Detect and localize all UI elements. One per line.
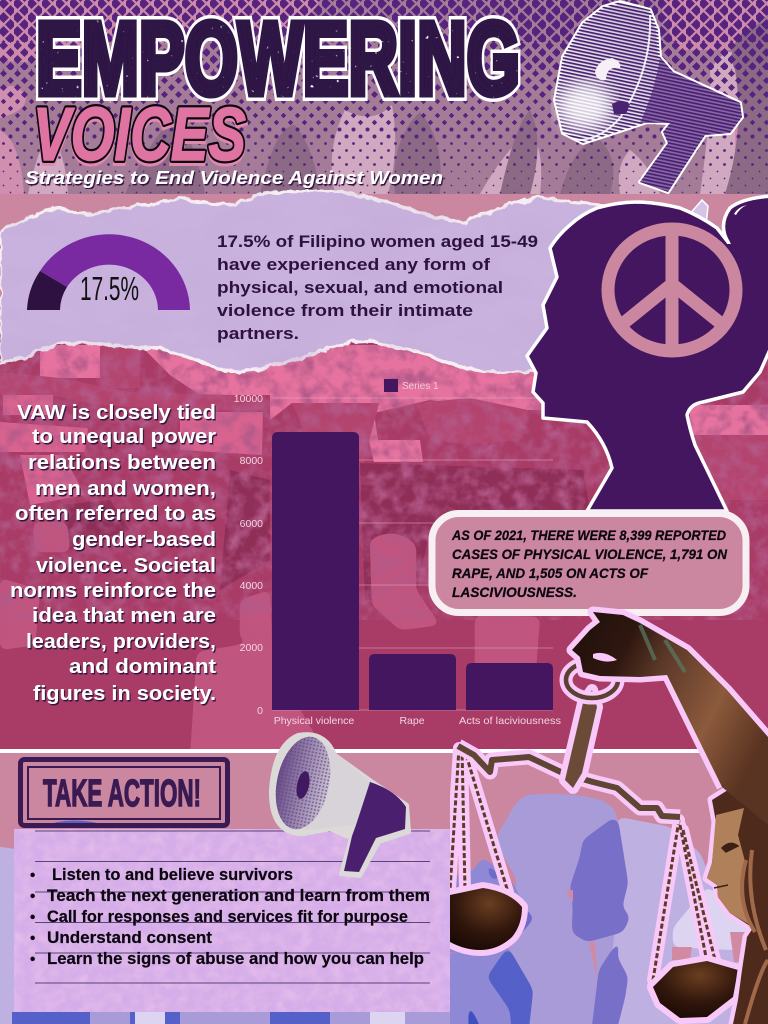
bell highlight [557,82,613,130]
y axis labels [234,393,263,717]
right pan [653,961,738,1018]
action list: Learn the signs of abuse and how you can help [47,950,424,968]
left paragraph on power relations: figures in society. [33,683,216,705]
panel: bottom section background [0,749,768,1024]
megaphone rear body [640,57,742,192]
y axis labels: 4000 [240,580,263,592]
callout: reported cases: AS OF 2021, THERE WERE 8,399 REPORTED [451,527,726,543]
cone dark spot [612,101,630,114]
left paragraph on power relations: violence. Societal [36,555,216,577]
gauge arc purple [40,234,190,310]
gauge chart 17.5% [27,234,190,310]
subtitle: Strategies to End Violence Against Women [25,168,443,188]
x axis labels: Acts of laciviousness [459,715,561,727]
take action list panel [14,829,450,1012]
panel: middle pink band [0,194,768,364]
megaphone stripes [555,2,742,192]
woman head silhouette with peace sign [527,196,768,511]
scale beam [458,746,680,817]
megaphone shape [555,2,742,192]
action list: Listen to and believe survivors [52,866,293,884]
torn paper sheet [0,190,640,373]
left paragraph on power relations: norms reinforce the [10,580,216,602]
y axis labels: 6000 [240,518,263,530]
y axis labels: 0 [257,705,263,717]
gap between fingers [593,653,617,662]
key bar [565,690,597,788]
chains [450,748,716,980]
wrist patina [640,625,685,672]
panel: header background [0,0,768,194]
strip of figures under the list [12,1012,450,1024]
left pan [450,888,522,950]
y axis labels: 8000 [240,455,263,467]
statue eye and lips [714,843,738,888]
callout: reported cases: LASCIVIOUSNESS. [452,584,577,600]
left paragraph on power relations: gender-based [72,529,216,551]
action list: • [30,867,35,884]
y axis labels: 10000 [234,393,263,405]
head silhouette [527,202,768,511]
megaphone body [305,740,370,830]
title: Voices: VOICES [33,92,246,176]
cone white speaker [595,58,620,80]
bun highlight [734,205,747,215]
megaphone bell [268,732,338,834]
peace symbol [608,229,736,351]
hanging ring [566,662,618,698]
title: Empowering: EMPOWERING [36,1,520,116]
pink gaps between figures [566,890,746,980]
chart legend: Series 1 [402,381,439,392]
megaphone outline [271,734,409,876]
callout: reported cases: CASES OF PHYSICAL VIOLENCE, 1,791 ON [452,546,728,562]
chart grid [272,398,553,710]
left paragraph on power relations: and dominant [69,656,216,678]
title: Empowering [36,1,520,116]
hair fill joining bun [726,244,768,344]
action list: • [30,951,35,968]
action list: • [30,888,35,905]
left paragraph on power relations: relations between [28,452,216,474]
statue head and shoulder [707,790,768,1024]
statistic paragraph: partners. [217,325,299,343]
gauge arc dark [27,271,67,310]
statue face [707,808,752,926]
take action stamp [20,760,228,826]
panel: protest photo background [0,340,768,760]
megaphone rear and handle [344,782,406,872]
list background [14,829,450,1012]
paper spike behind head [688,200,708,226]
statistic paragraph: violence from their intimate [217,302,473,320]
left paragraph on power relations: to unequal power [32,426,216,448]
left paragraph on power relations: often referred to as [15,503,216,525]
silhouette figures [0,794,752,1024]
action list: • [30,909,35,926]
y axis labels: 2000 [240,642,263,654]
left paragraph on power relations: VAW is closely tied [17,402,216,424]
gauge value: 17.5% [80,270,139,307]
action list: Understand consent [47,929,213,947]
hair strands [742,850,768,1024]
action list: • [30,930,35,947]
hair bun [723,196,768,345]
left paragraph on power relations: men and women, [35,478,216,500]
title: Voices: VOICES [33,92,246,176]
statistic paragraph: have experienced any form of [217,256,491,274]
left paragraph on power relations: leaders, providers, [26,631,216,653]
statistic paragraph: physical, sexual, and emotional [217,279,503,297]
x axis labels: Physical violence [274,715,354,727]
x axis labels [274,715,561,727]
x axis labels: Rape [399,715,425,727]
action list: Call for responses and services fit for purpose [47,908,408,926]
bell rim [578,15,650,140]
scale of justice statue [450,612,768,1024]
callout: reported cases [432,514,746,612]
arm halo [572,612,768,787]
callout: reported cases: RAPE, AND 1,505 ON ACTS OF [452,565,648,581]
title: Voices: VOICES [33,95,246,179]
bars [272,432,553,710]
statue arm [572,612,768,825]
bar chart [234,379,561,727]
statistic paragraph [217,233,538,343]
left paragraph on power relations [10,402,216,705]
left paragraph on power relations: idea that men are [32,605,216,627]
chart legend [384,379,439,392]
statistic paragraph: 17.5% of Filipino women aged 15-49 [217,233,538,251]
icon: small megaphone [268,732,409,876]
take action stamp: TAKE ACTION! [43,773,201,815]
action list: Teach the next generation and learn from them [47,887,430,905]
title: Empowering: EMPOWERING [36,1,520,116]
torn paper panel [0,190,640,373]
icon: large megaphone [555,2,742,192]
action list [30,866,430,968]
ruled lines [35,831,430,983]
